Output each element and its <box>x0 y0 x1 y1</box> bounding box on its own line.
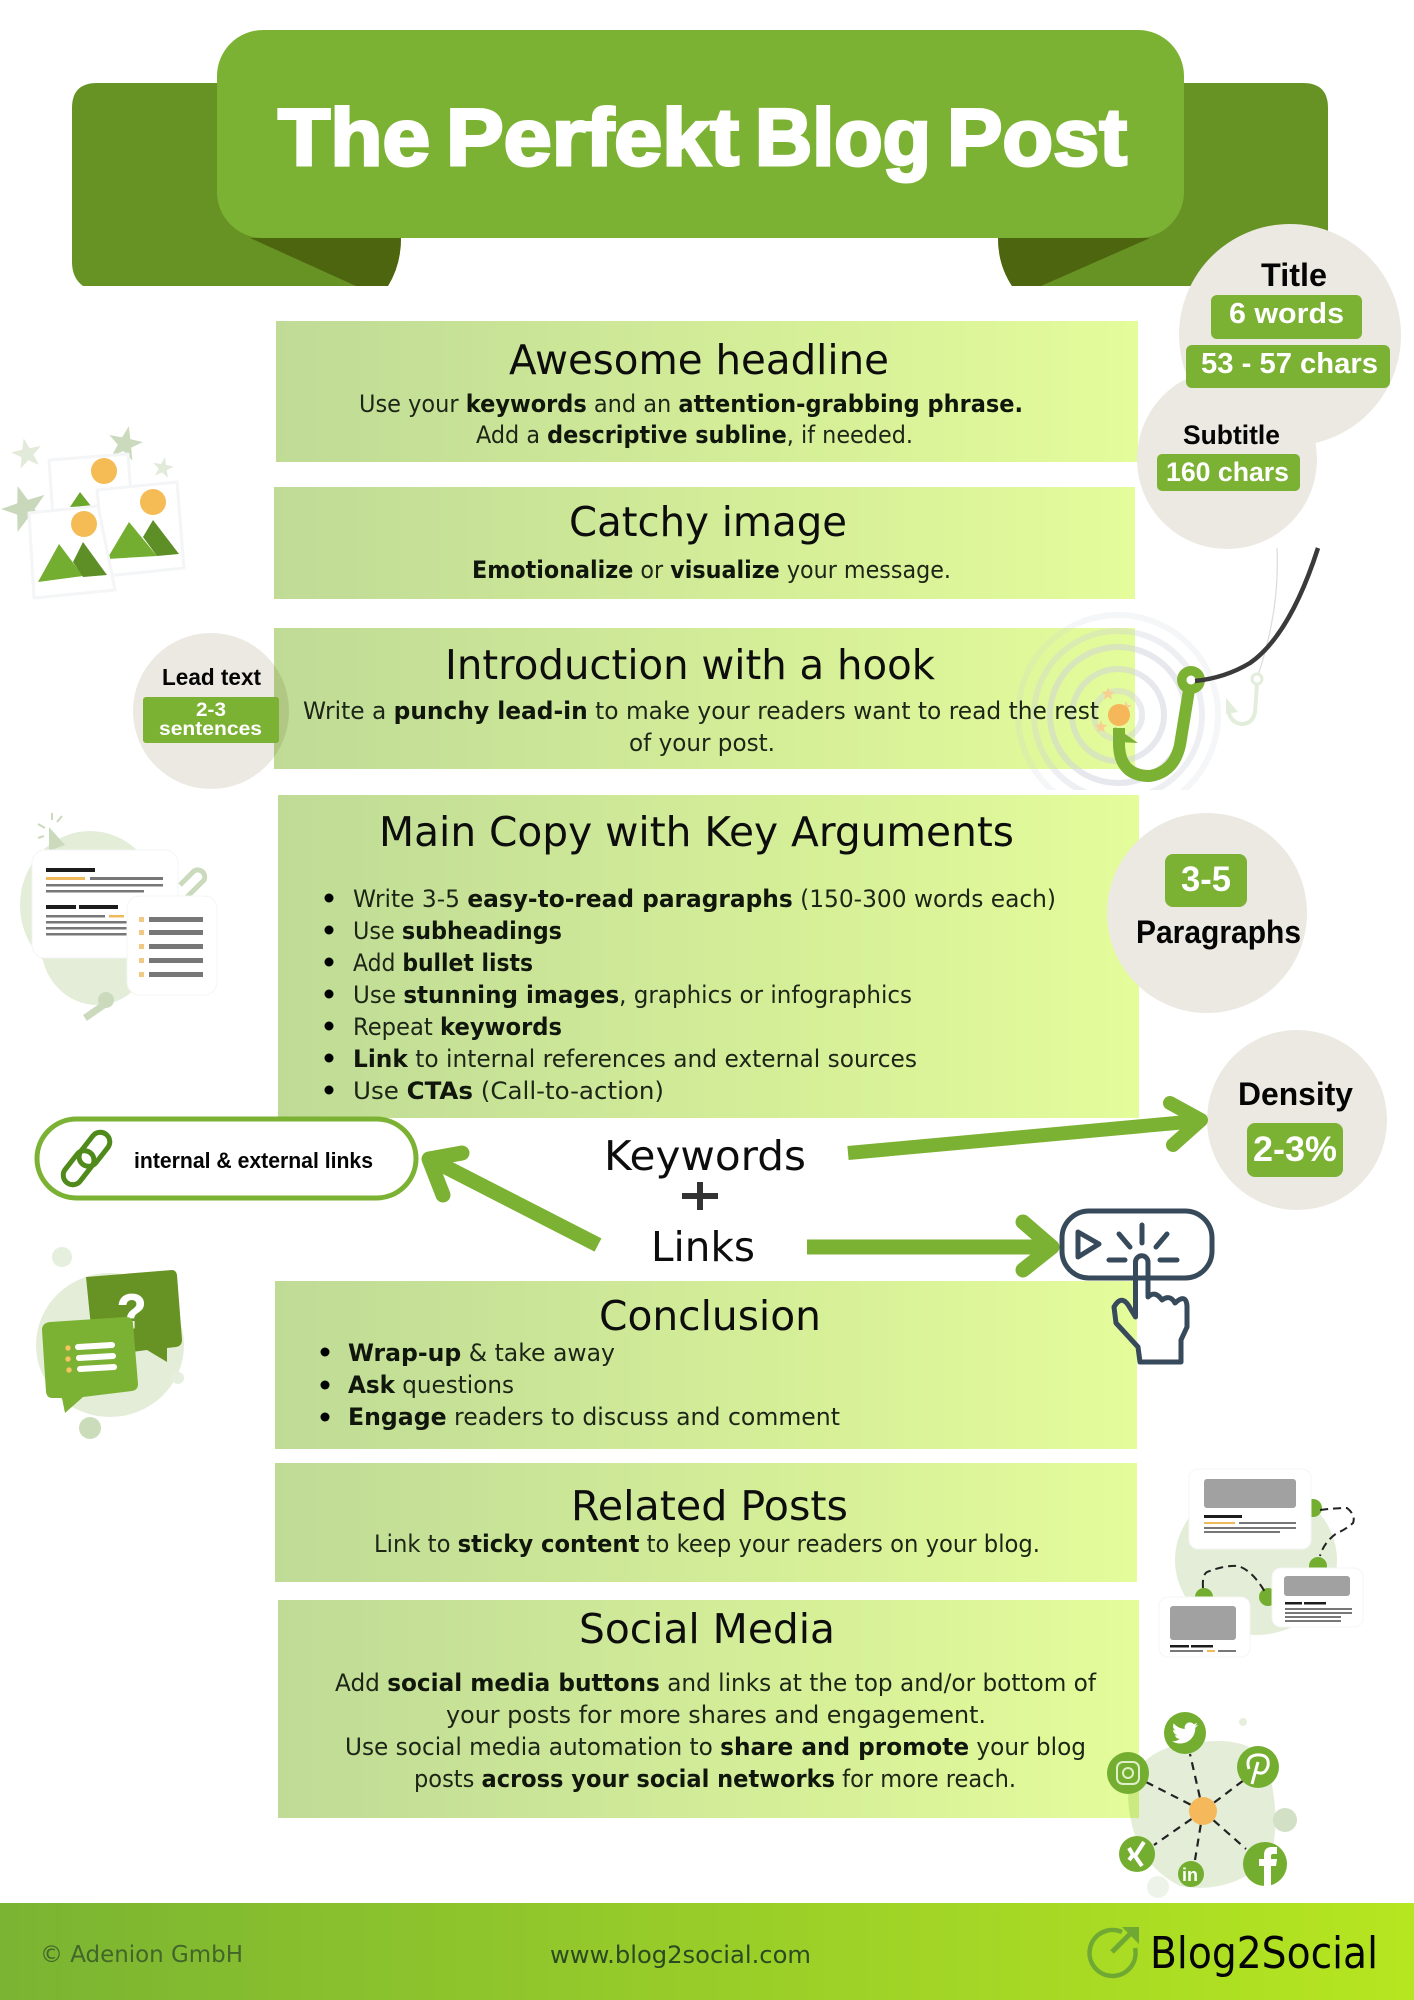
heading: related posts: Related Posts <box>571 1482 848 1530</box>
callout: paragraphs: Paragraphs <box>1136 914 1301 950</box>
text: lead-in: Write a punchy lead-in to make your readers want to read the rest <box>303 697 1099 725</box>
arrow: to call-to-action <box>807 1222 1052 1270</box>
icon: fish hook <box>1094 548 1318 776</box>
text: blog2social brand: Blog2Social <box>1150 1928 1378 1979</box>
heading: social media: Social Media <box>579 1605 835 1653</box>
callout: title and subtitle: Subtitle <box>1183 420 1280 450</box>
footer <box>0 1903 1414 2000</box>
callout: title and subtitle: 6 words <box>1229 298 1344 330</box>
text: emotionalize: Emotionalize or visualize your message. <box>472 556 951 584</box>
icon: linkedin <box>1178 1861 1204 1887</box>
text: pill label: internal & external links <box>134 1148 373 1173</box>
callout: title and subtitle: 160 chars <box>1166 457 1289 487</box>
bullet list: main copy: Write 3-5 easy-to-read paragraphs (150-300 words each) <box>353 885 1056 913</box>
icon: photos with stars <box>0 423 184 598</box>
text: social media copy: your posts for more shares and engagement. <box>446 1701 986 1729</box>
panel: awesome headline <box>276 321 1138 462</box>
pill: internal and external links <box>37 1119 416 1198</box>
callout: lead text: sentences <box>159 719 262 740</box>
callout: lead text <box>133 633 289 789</box>
title: Blog <box>755 93 931 183</box>
bullet list: main copy: Use CTAs (Call-to-action) <box>353 1077 664 1105</box>
bullet list: main copy: Use stunning images, graphics or infographics <box>353 981 912 1009</box>
heading: main copy: Main Copy with Key Arguments <box>379 808 1014 856</box>
callout: title and subtitle: Title <box>1261 257 1327 293</box>
icon: button with click hand <box>1062 1211 1212 1362</box>
text: social media copy: Add social media buttons and links at the top and/or bottom of <box>335 1669 1097 1697</box>
panel: conclusion <box>275 1281 1137 1449</box>
panel: introduction <box>274 612 1221 790</box>
icon: twitter <box>1164 1712 1206 1754</box>
icon: instagram <box>1107 1752 1149 1794</box>
heading: conclusion: Conclusion <box>599 1292 821 1340</box>
arrow: to links pill <box>429 1153 598 1245</box>
text: website: www.blog2social.com <box>550 1941 811 1969</box>
text: subline: Add a descriptive subline, if needed. <box>476 421 913 449</box>
keywords plus links: Keywords <box>604 1132 806 1180</box>
text: lead-in second line: of your post. <box>629 729 775 757</box>
bullet list: conclusion <box>320 1339 840 1431</box>
icon: xing <box>1119 1836 1155 1872</box>
heading: awesome headline: Awesome headline <box>509 336 889 384</box>
callout: title and subtitle: 53 - 57 chars <box>1201 348 1378 380</box>
icon: document and list <box>20 813 217 1018</box>
title: Post <box>947 93 1127 183</box>
text: social media copy <box>335 1669 1097 1793</box>
bullet list: main copy: Link to internal references and external sources <box>353 1045 917 1073</box>
callout: density: 2-3% <box>1253 1130 1337 1169</box>
callout: paragraphs <box>1107 813 1307 1013</box>
bullet list: main copy: Repeat keywords <box>353 1013 562 1041</box>
icon: blog2social logo <box>1090 1927 1139 1976</box>
keywords plus links <box>604 1132 806 1271</box>
text: copyright: © Adenion GmbH <box>40 1942 243 1968</box>
callout: title and subtitle <box>1137 224 1401 549</box>
icon: chat bubbles: ? <box>117 1286 146 1339</box>
title: Perfekt <box>446 93 739 183</box>
callout: paragraphs: 3-5 <box>1181 860 1231 899</box>
bullet list: main copy: Add bullet lists <box>353 949 533 977</box>
panel: related posts <box>275 1463 1137 1582</box>
callout: density: Density <box>1238 1076 1353 1112</box>
icon: pinterest <box>1237 1746 1279 1788</box>
title: The <box>278 93 430 183</box>
panel: main copy <box>278 795 1139 1118</box>
banner <box>72 30 1328 286</box>
callout: density <box>1207 1030 1387 1210</box>
callout: lead text: 2-3 <box>196 700 226 721</box>
panel: social media <box>278 1600 1139 1818</box>
text: social media copy: Use social media automation to share and promote your blog <box>345 1733 1086 1761</box>
icon: facebook <box>1243 1842 1287 1886</box>
icon: related posts cards <box>1159 1469 1363 1657</box>
icon: linkedin: in <box>1182 1865 1198 1885</box>
heading: catchy image: Catchy image <box>569 498 847 546</box>
bullet list: conclusion: Engage readers to discuss and comment <box>348 1403 840 1431</box>
panel: catchy image <box>274 487 1135 599</box>
heading: introduction: Introduction with a hook <box>445 641 935 689</box>
keywords plus links: Links <box>651 1223 755 1271</box>
text: sticky content: Link to sticky content to keep your readers on your blog. <box>374 1530 1040 1558</box>
bullet list: conclusion: Ask questions <box>348 1371 514 1399</box>
bullet list: conclusion: Wrap-up & take away <box>348 1339 615 1367</box>
text: keywords: Use your keywords and an attention-grabbing phrase. <box>359 390 1023 418</box>
icon: social network <box>1107 1712 1297 1898</box>
callout: lead text: Lead text <box>162 664 261 690</box>
bullet list: main copy: Use subheadings <box>353 917 562 945</box>
text: social media copy: posts across your social networks for more reach. <box>414 1765 1016 1793</box>
icon: chain link <box>59 1128 114 1189</box>
icon: target rings <box>1018 615 1218 815</box>
arrow: to density <box>848 1103 1201 1153</box>
icon: chat bubbles <box>36 1247 184 1439</box>
bullet list: main copy <box>324 885 1056 1105</box>
